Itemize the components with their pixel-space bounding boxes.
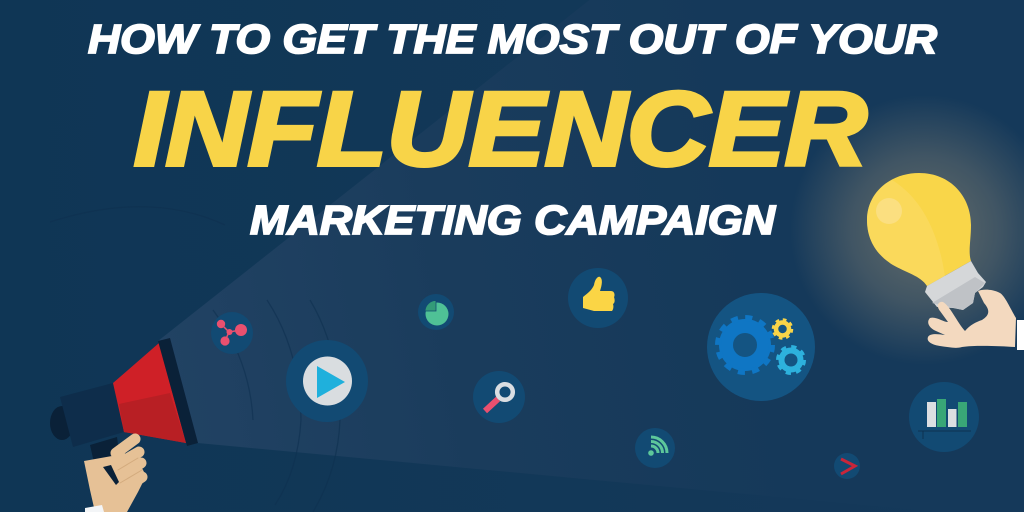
title line 3: MARKETING CAMPAIGN: [250, 197, 777, 243]
title line 2: influencer: INFLUENCER: [134, 71, 867, 188]
lightbulb: [867, 173, 986, 310]
title line 1: HOW TO GET THE MOST OUT OF YOUR: [88, 16, 937, 62]
hand holding lightbulb: [928, 290, 1024, 350]
icon: magnifying glass: [473, 371, 525, 423]
icon: gears: [707, 293, 815, 401]
megaphone back cap: [50, 406, 74, 440]
bulb highlight: [876, 198, 902, 224]
icon: red arrow: [834, 453, 860, 479]
icon: pie chart: [418, 294, 454, 330]
megaphone rim: [158, 338, 198, 446]
icon: bar chart: [909, 382, 979, 452]
icon: thumbs up: [568, 268, 628, 328]
bulb glass: [867, 173, 971, 286]
sound wave arcs: [50, 207, 340, 512]
megaphone handle: [90, 437, 122, 480]
megaphone: [50, 338, 198, 480]
icon: play button: [286, 340, 368, 422]
bulb screw base: [925, 261, 986, 310]
hand holding megaphone: [84, 439, 146, 512]
megaphone body: [60, 383, 124, 447]
icon: share nodes: [211, 312, 253, 354]
icon: rss signal: [635, 428, 675, 468]
megaphone red cone: [113, 343, 186, 443]
lightbulb glow: [785, 90, 1024, 370]
